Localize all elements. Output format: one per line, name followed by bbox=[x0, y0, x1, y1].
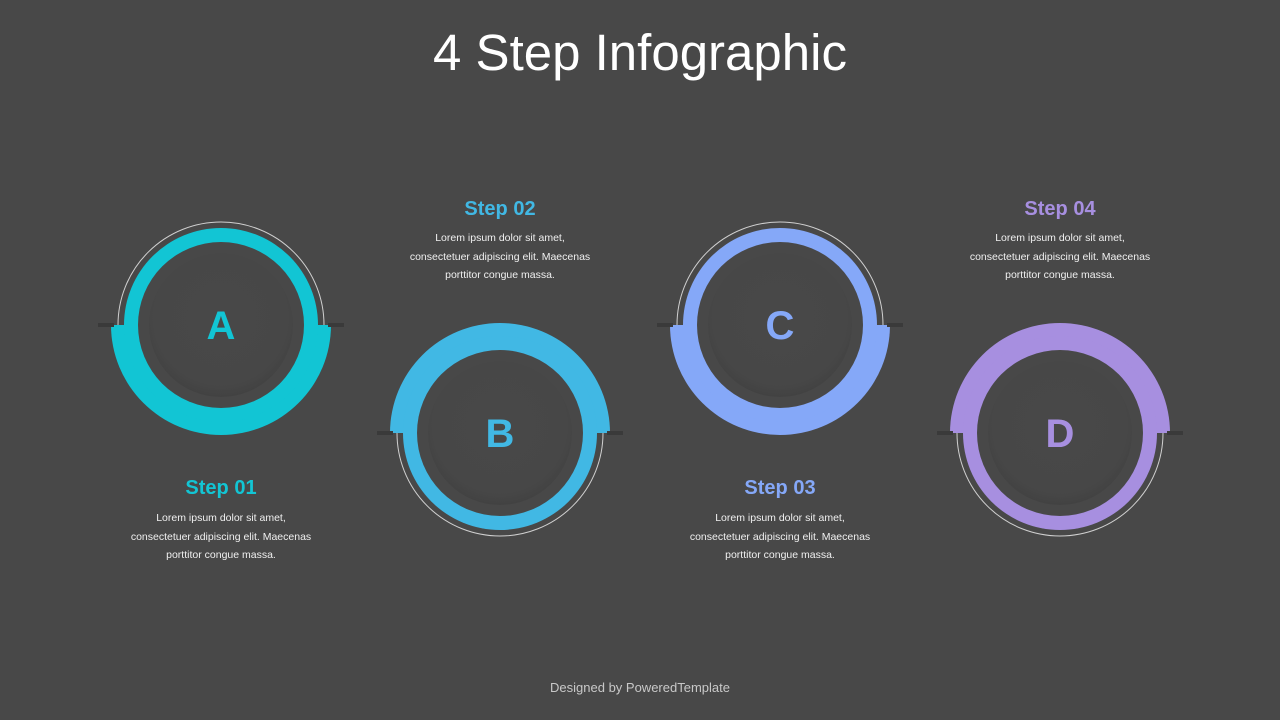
step C circle bbox=[657, 222, 903, 435]
step D circle bbox=[937, 323, 1183, 536]
text: step 03: consectetuer adipiscing elit. Maecenas bbox=[690, 531, 870, 543]
text: step 01 bbox=[131, 477, 311, 561]
text: step 01: porttitor congue massa. bbox=[166, 549, 276, 561]
title: 4 Step Infographic bbox=[433, 24, 847, 81]
text: step 02: Lorem ipsum dolor sit amet, bbox=[435, 232, 565, 244]
text: step 01: Lorem ipsum dolor sit amet, bbox=[156, 512, 286, 524]
letter C: C bbox=[766, 304, 794, 348]
text: step 02: porttitor congue massa. bbox=[445, 269, 555, 281]
text: step 03 bbox=[690, 477, 870, 561]
step A circle bbox=[98, 222, 344, 435]
text: step 04 bbox=[970, 198, 1150, 281]
text: step 03: Lorem ipsum dolor sit amet, bbox=[715, 512, 845, 524]
text: step 04: porttitor congue massa. bbox=[1005, 269, 1115, 281]
text: step 01: consectetuer adipiscing elit. Maecenas bbox=[131, 531, 311, 543]
text: step 04: Step 04 bbox=[1024, 198, 1096, 220]
letter B: B bbox=[486, 412, 514, 456]
text: step 01: Step 01 bbox=[185, 477, 257, 499]
letter D: D bbox=[1046, 412, 1074, 456]
text: step 04: Lorem ipsum dolor sit amet, bbox=[995, 232, 1125, 244]
text: step 02: consectetuer adipiscing elit. Maecenas bbox=[410, 251, 590, 263]
text: step 02: Step 02 bbox=[464, 198, 536, 220]
letter A: A bbox=[207, 304, 235, 348]
footer: Designed by PoweredTemplate bbox=[550, 680, 730, 695]
step B circle bbox=[377, 323, 623, 536]
text: step 04: consectetuer adipiscing elit. Maecenas bbox=[970, 251, 1150, 263]
text: step 02 bbox=[410, 198, 590, 281]
text: step 03: Step 03 bbox=[744, 477, 816, 499]
text: step 03: porttitor congue massa. bbox=[725, 549, 835, 561]
